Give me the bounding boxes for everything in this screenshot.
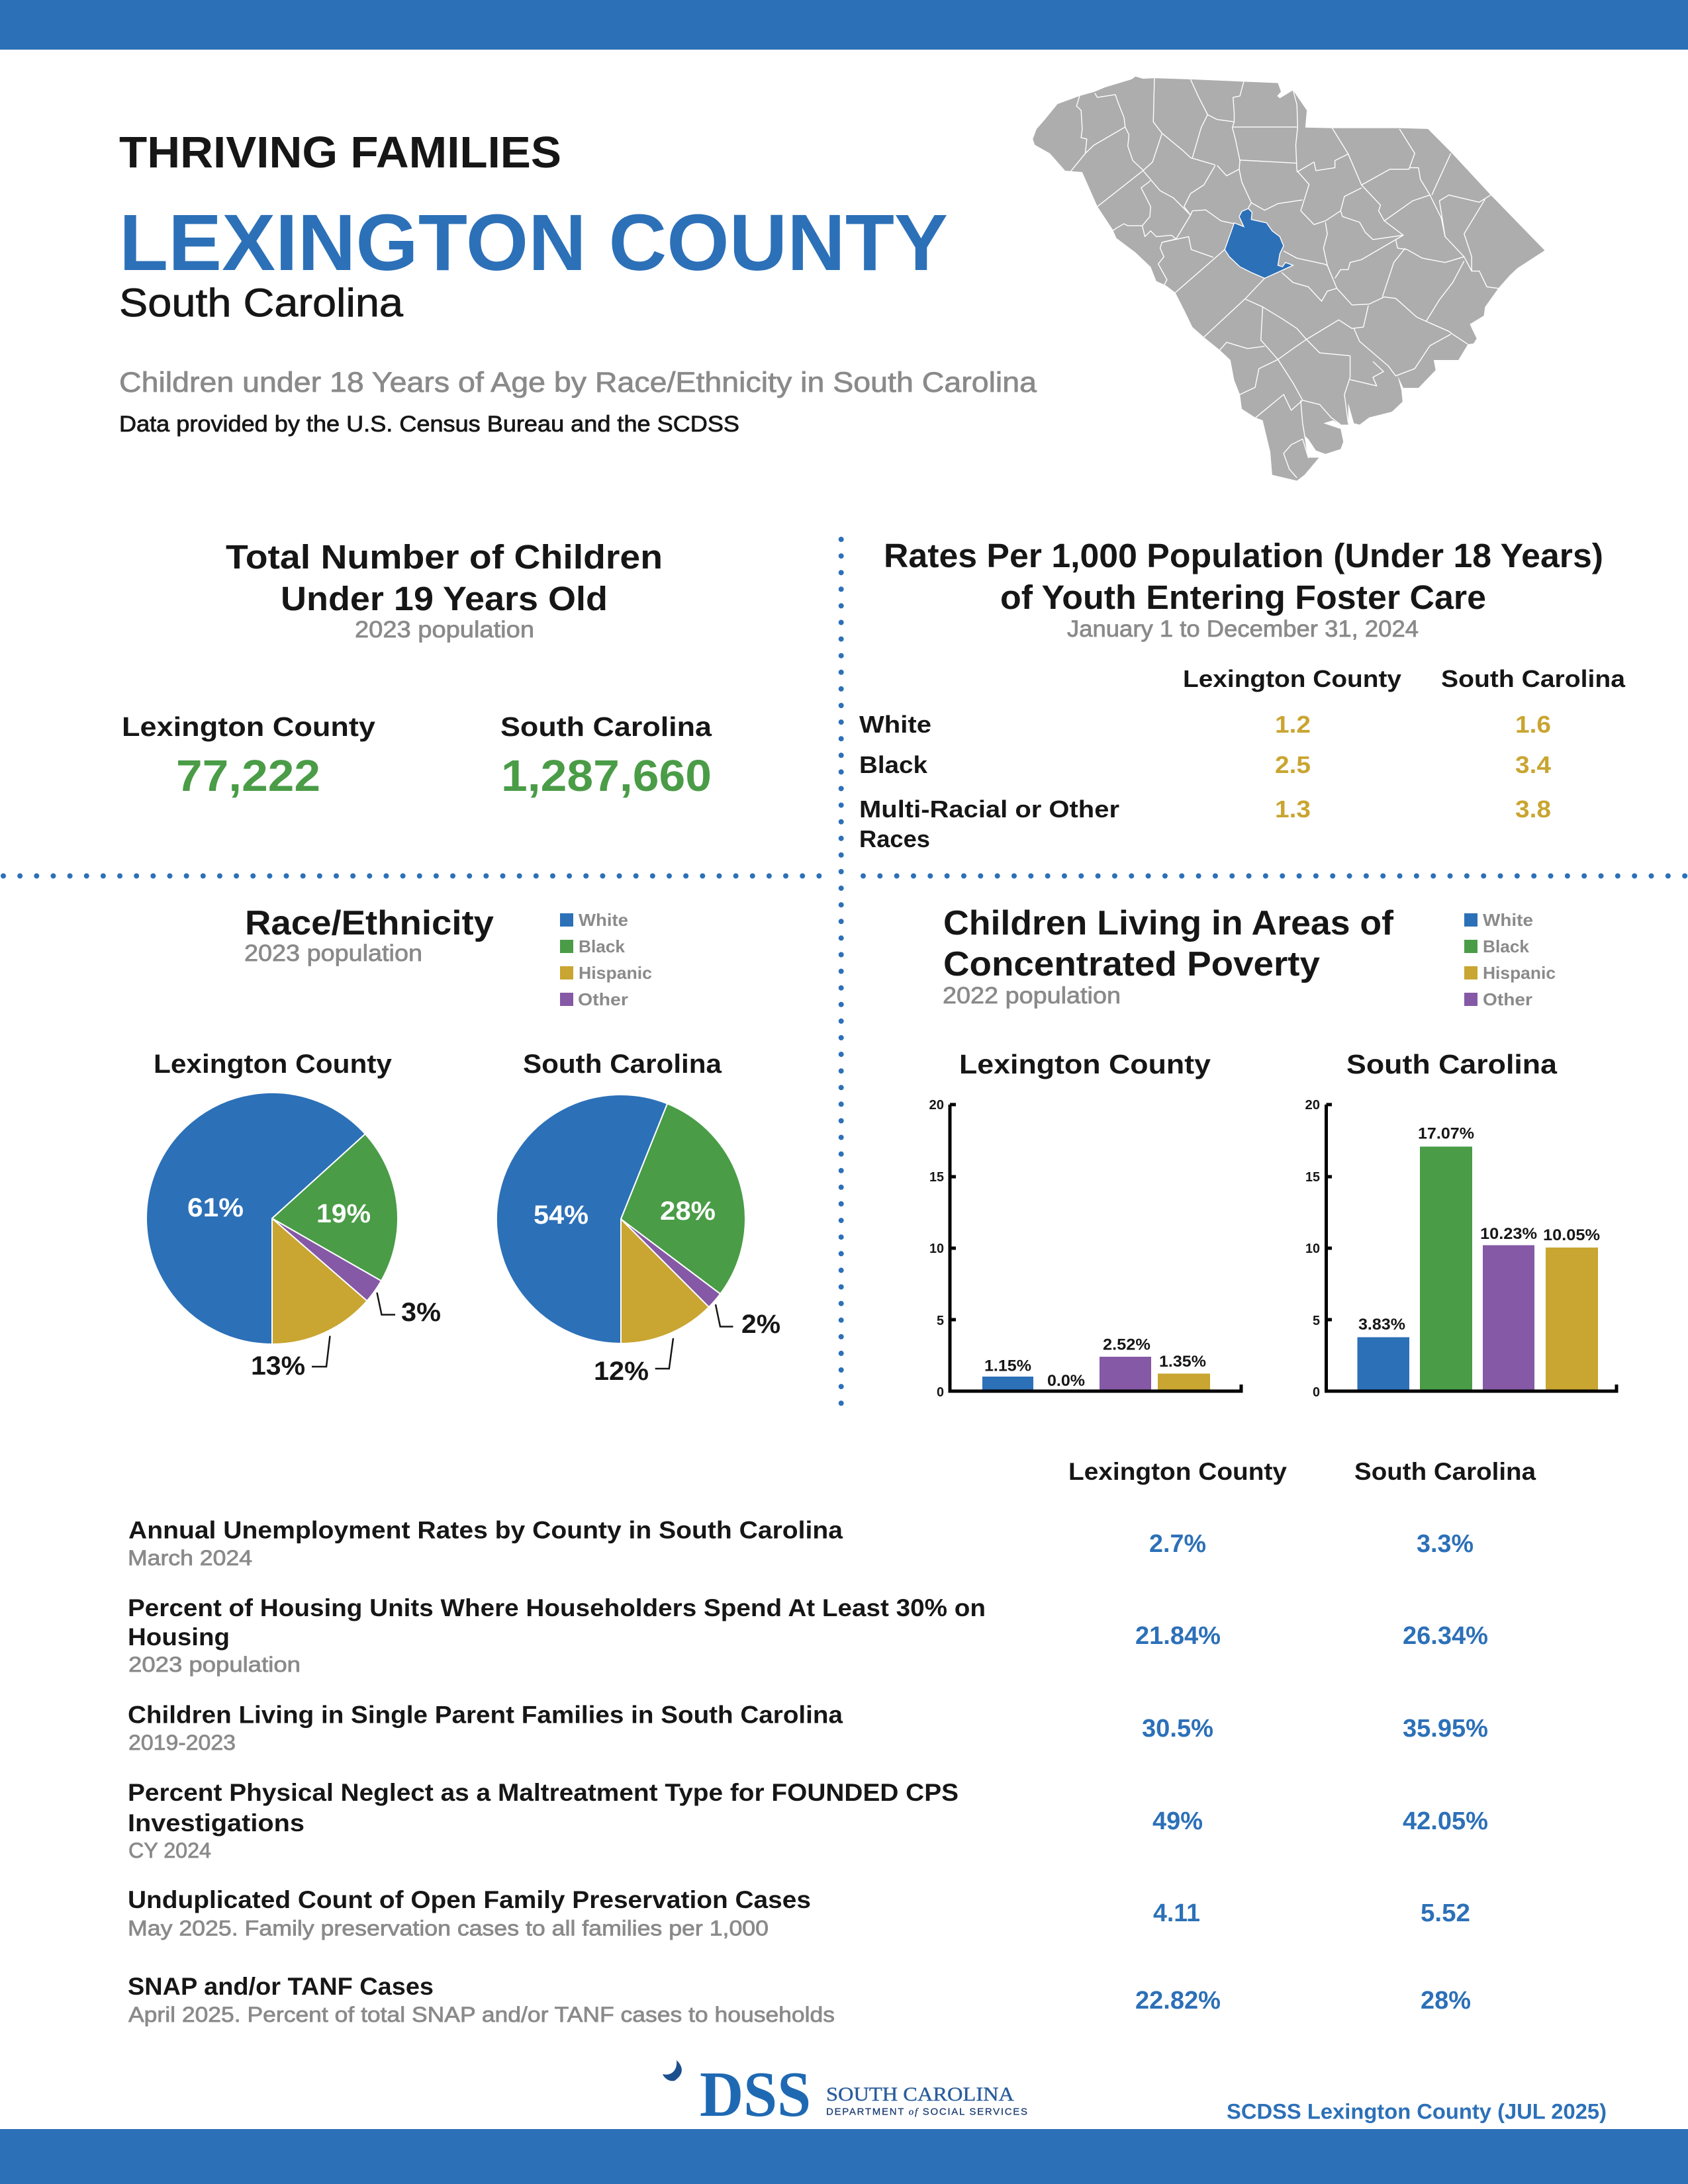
- row: White: White: [859, 711, 931, 738]
- row: physical neglect: 42.05%: [1403, 1807, 1488, 1835]
- row: single parent families: 2019-2023: [128, 1731, 236, 1754]
- bar chart: Lexington County: 15: [929, 1170, 944, 1185]
- row: unemployment: March 2024: [128, 1546, 252, 1570]
- caption: 2023 population: 2023 population: [355, 617, 534, 643]
- row: single parent families: 30.5%: [1142, 1715, 1213, 1743]
- column header: South Carolina: South Carolina: [1354, 1458, 1536, 1485]
- title: Lexington County: LEXINGTON COUNTY: [119, 197, 948, 287]
- row: SNAP/TANF: 22.82%: [1135, 1987, 1221, 2015]
- icon: crescent moon: [663, 2060, 682, 2081]
- logo: SC DSS: DEPARTMENT of SOCIAL SERVICES: [826, 2106, 1027, 2118]
- row: Multi-Racial or Other Races: [859, 796, 1551, 852]
- row: unemployment: Annual Unemployment Rates by County in South Carolina: [128, 1517, 843, 1543]
- row: housing: 26.34%: [1403, 1622, 1488, 1650]
- heading line 2: Concentrated Poverty: [943, 945, 1320, 983]
- row: single parent families: Children Living in Single Parent Families in South Carolina: [128, 1701, 843, 1729]
- row: Multi-Racial or Other Races: Races: [859, 825, 930, 852]
- row: housing: 2023 population: [128, 1653, 301, 1676]
- bar chart: South Carolina: 10.23%: [1480, 1225, 1537, 1243]
- bar chart: South Carolina: 17.07%: [1418, 1125, 1474, 1142]
- stat label: South Carolina: South Carolina: [500, 711, 712, 742]
- pie chart: Lexington County: [146, 1050, 441, 1381]
- row: unemployment: [128, 1517, 1474, 1570]
- pie chart: South Carolina: 2%: [741, 1310, 780, 1339]
- row: White: 1.2: [1275, 711, 1311, 738]
- bar chart: South Carolina: 15: [1305, 1170, 1320, 1185]
- panel: total number of children: [122, 538, 712, 801]
- row: Multi-Racial or Other Races: Multi-Racial or Other: [859, 796, 1119, 823]
- row: family preservation: 5.52: [1421, 1899, 1470, 1927]
- description line: Children under 18 Years of Age by Race/Ethnicity in South Carolina: [119, 367, 1037, 398]
- pie chart: South Carolina: 28%: [660, 1197, 716, 1226]
- bar chart: Lexington County: 20: [929, 1098, 944, 1113]
- column header: Lexington County: Lexington County: [1183, 665, 1401, 692]
- legend: race/ethnicity: White: [579, 910, 628, 930]
- header text block: [119, 128, 1037, 437]
- row: Black: 3.4: [1515, 751, 1551, 778]
- row: housing: [128, 1594, 1488, 1676]
- pie chart: Lexington County: 3%: [401, 1298, 441, 1327]
- bar chart: Lexington County: Lexington County: [959, 1049, 1211, 1079]
- top banner: [0, 0, 1688, 50]
- column header: South Carolina: South Carolina: [1441, 665, 1626, 692]
- pie chart: Lexington County: Lexington County: [154, 1050, 393, 1079]
- row: Black: Black: [859, 751, 928, 778]
- row: family preservation: May 2025. Family preservation cases to all families per 1,000: [128, 1917, 769, 1940]
- logo: SC DSS: DSS: [700, 2059, 811, 2130]
- row: Multi-Racial or Other Races: 1.3: [1275, 796, 1311, 823]
- panel: race/ethnicity: [146, 904, 780, 1386]
- heading: concentrated poverty: Children Living in Areas of: [943, 904, 1394, 942]
- row: family preservation: 4.11: [1153, 1899, 1200, 1927]
- row: unemployment: 2.7%: [1149, 1530, 1206, 1558]
- bar chart: Lexington County: 10: [929, 1242, 944, 1256]
- column header: Lexington County: Lexington County: [1068, 1458, 1287, 1485]
- bar chart: South Carolina: 5: [1313, 1314, 1320, 1328]
- bar chart: Lexington County: 0: [937, 1385, 944, 1400]
- bar chart: Lexington County: 2.52%: [1103, 1336, 1150, 1354]
- bar chart: South Carolina: 10.05%: [1543, 1226, 1600, 1244]
- heading: total number of children: Total Number of Children: [226, 538, 663, 576]
- legend: poverty: Hispanic: [1483, 963, 1556, 983]
- stat: South Carolina children: 1,287,660: [501, 751, 712, 801]
- row: housing: Percent of Housing Units Where Householders Spend At Least 30% on: [128, 1594, 986, 1621]
- data source line: Data provided by the U.S. Census Bureau and the SCDSS: [119, 412, 739, 437]
- subtitle: South Carolina: South Carolina: [119, 281, 404, 325]
- logo: SC DSS: SOUTH CAROLINA: [826, 2083, 1014, 2105]
- legend: poverty: White: [1483, 910, 1533, 930]
- row: physical neglect: CY 2024: [128, 1839, 211, 1862]
- row: SNAP/TANF: 28%: [1421, 1987, 1471, 2015]
- row: Multi-Racial or Other Races: 3.8: [1515, 796, 1551, 823]
- row: family preservation: Unduplicated Count of Open Family Preservation Cases: [128, 1886, 811, 1913]
- caption: date range: January 1 to December 31, 2024: [1067, 616, 1419, 642]
- caption: 2023 population: 2023 population: [244, 940, 422, 966]
- bar chart: South Carolina: 3.83%: [1358, 1316, 1405, 1334]
- row: White: [859, 711, 1551, 738]
- row: SNAP/TANF: SNAP and/or TANF Cases: [128, 1973, 434, 2000]
- logo: SC DSS: [663, 2059, 1027, 2130]
- legend: race/ethnicity: [560, 910, 652, 1009]
- pie chart: South Carolina: [496, 1050, 780, 1386]
- panel: foster care rates: [859, 537, 1626, 852]
- caption: 2022 population: 2022 population: [943, 983, 1121, 1009]
- pie chart: Lexington County: 13%: [251, 1351, 305, 1381]
- row: housing: 21.84%: [1135, 1622, 1221, 1650]
- row: SNAP/TANF: [128, 1973, 1471, 2026]
- legend: race/ethnicity: Other: [578, 989, 628, 1009]
- pie chart: Lexington County: 19%: [316, 1199, 371, 1228]
- stat: Lexington County children: 77,222: [176, 751, 320, 801]
- bottom banner: [0, 2129, 1688, 2184]
- bar chart: Lexington County: 1.15%: [984, 1357, 1031, 1375]
- legend: poverty: Black: [1483, 936, 1530, 956]
- heading: foster care rates: Rates Per 1,000 Population (Under 18 Years): [884, 537, 1603, 574]
- legend: poverty: [1464, 910, 1556, 1009]
- bar chart: South Carolina: South Carolina: [1346, 1049, 1558, 1079]
- county: Lexington: [1225, 208, 1293, 278]
- row: single parent families: [128, 1701, 1488, 1754]
- bar chart: South Carolina: 0: [1313, 1385, 1320, 1400]
- bar chart: Lexington County: 0.0%: [1047, 1372, 1085, 1390]
- legend: race/ethnicity: Black: [579, 936, 626, 956]
- bar chart: Lexington County: 1.35%: [1159, 1353, 1206, 1371]
- pie chart: South Carolina: 54%: [534, 1201, 588, 1230]
- footer credit: SCDSS Lexington County (JUL 2025): [1227, 2099, 1607, 2123]
- row: family preservation: [128, 1886, 1470, 1940]
- panel: concentrated poverty: [929, 904, 1617, 1400]
- panel: indicators table: [128, 1458, 1536, 2026]
- pie chart: South Carolina: South Carolina: [523, 1050, 722, 1079]
- bar chart: South Carolina: [1305, 1049, 1617, 1400]
- row: single parent families: 35.95%: [1403, 1715, 1488, 1743]
- heading line 2: of Youth Entering Foster Care: [1000, 578, 1486, 616]
- row: unemployment: 3.3%: [1417, 1530, 1474, 1558]
- row: housing: Housing: [128, 1623, 230, 1651]
- row: physical neglect: Percent Physical Neglect as a Maltreatment Type for FOUNDED CPS: [128, 1779, 959, 1806]
- row: White: 1.6: [1515, 711, 1551, 738]
- legend: race/ethnicity: Hispanic: [579, 963, 652, 983]
- row: physical neglect: Investigations: [128, 1809, 305, 1837]
- heading: race/ethnicity: Race/Ethnicity: [245, 904, 494, 942]
- row: physical neglect: [128, 1779, 1488, 1862]
- row: physical neglect: 49%: [1152, 1807, 1203, 1835]
- heading line 2: Under 19 Years Old: [281, 580, 608, 617]
- bar chart: South Carolina: 20: [1305, 1098, 1320, 1113]
- bar chart: Lexington County: [929, 1049, 1241, 1400]
- bar chart: Lexington County: 5: [937, 1314, 944, 1328]
- legend: poverty: Other: [1483, 989, 1532, 1009]
- bar chart: South Carolina: 10: [1305, 1242, 1320, 1256]
- stat label: Lexington County: Lexington County: [122, 711, 375, 742]
- title: Thriving Families: THRIVING FAMILIES: [119, 128, 561, 177]
- pie chart: South Carolina: 12%: [594, 1357, 649, 1386]
- map: South Carolina counties with Lexington highlighted: [1033, 77, 1544, 480]
- pie chart: Lexington County: 61%: [187, 1193, 244, 1222]
- row: Black: [859, 751, 1551, 778]
- row: SNAP/TANF: April 2025. Percent of total SNAP and/or TANF cases to households: [128, 2003, 835, 2026]
- row: Black: 2.5: [1275, 751, 1311, 778]
